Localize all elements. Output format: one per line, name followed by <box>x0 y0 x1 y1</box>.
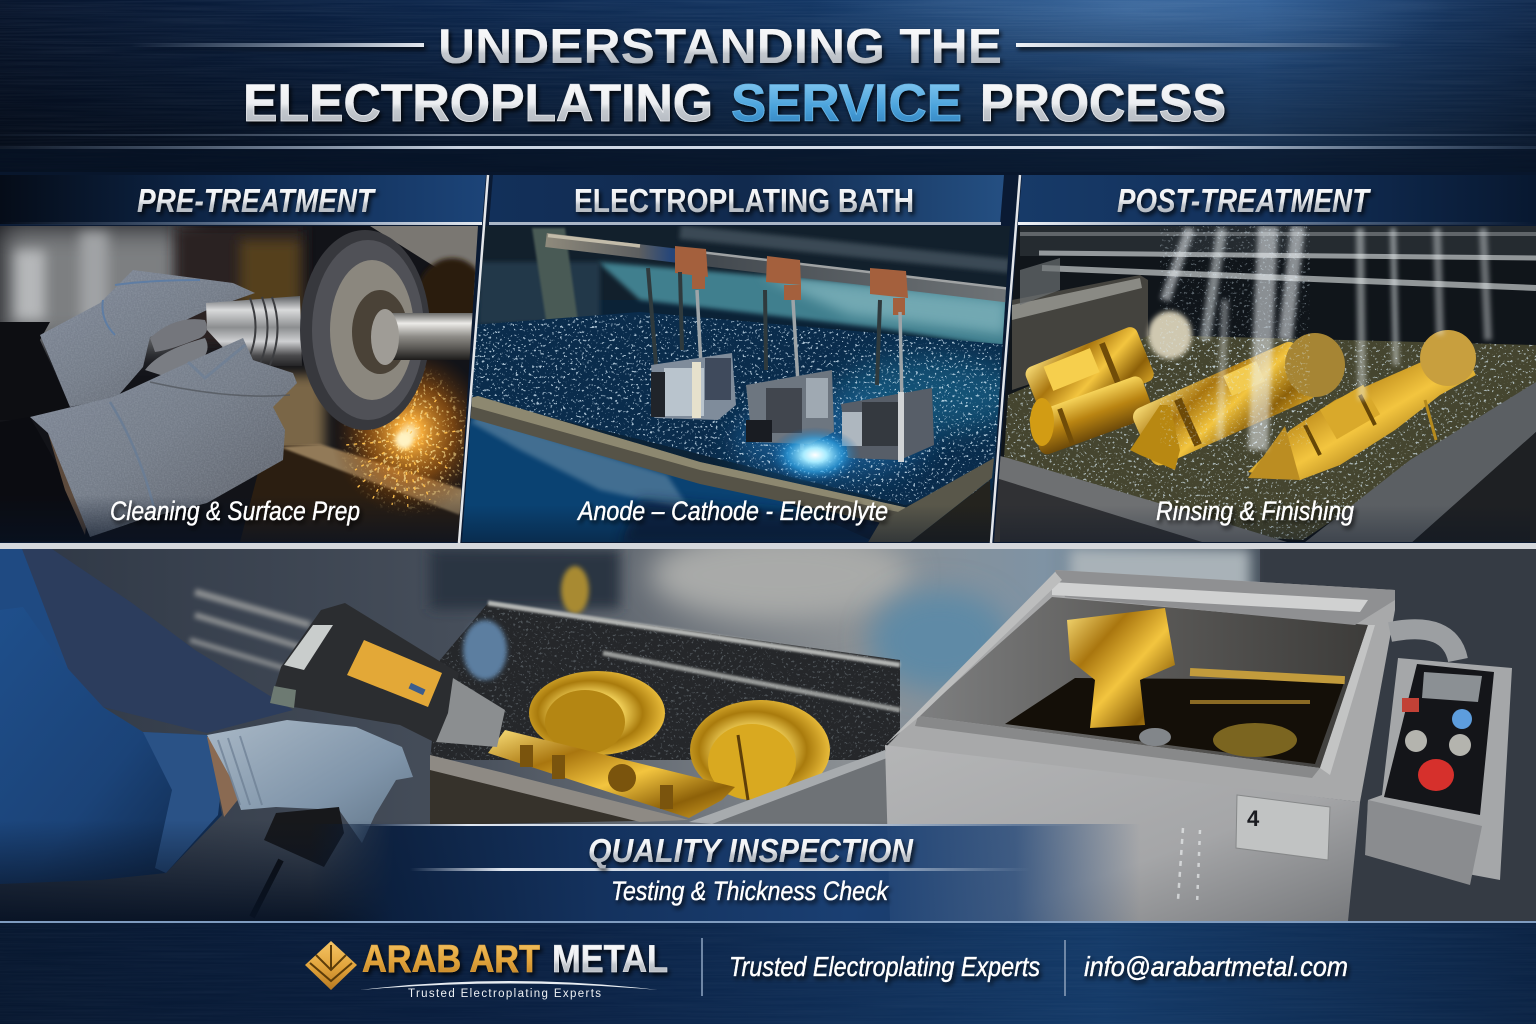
tank label: 4 <box>1247 806 1260 831</box>
yellow label <box>347 640 442 707</box>
tank rim <box>470 396 908 528</box>
tank label <box>1236 795 1330 860</box>
electrolyte glow <box>769 427 861 483</box>
photo: rinsing tank <box>990 226 1536 546</box>
heading bar: pre-treatment <box>0 175 486 225</box>
footer band <box>0 921 1536 1024</box>
rinse water surface <box>1004 335 1536 540</box>
middle tank wall <box>430 770 689 824</box>
title: UNDERSTANDING THE <box>438 20 1002 74</box>
control panel <box>1365 658 1512 885</box>
rinse tank <box>885 570 1395 921</box>
water drips <box>1178 828 1200 905</box>
hanger rods <box>697 290 903 450</box>
tagline: Trusted Electroplating Experts <box>729 951 1040 982</box>
heading bar: electroplating bath <box>489 175 1004 225</box>
workpiece <box>206 296 302 366</box>
panel: pre-treatment <box>0 175 490 542</box>
photo: plating tank <box>460 226 1025 544</box>
spark glow <box>336 360 468 508</box>
title <box>130 20 1406 133</box>
back glove <box>40 270 255 407</box>
title: PROCESS <box>980 74 1226 133</box>
front glove <box>30 338 297 537</box>
panel: post-treatment <box>990 175 1536 546</box>
logo <box>305 938 668 1000</box>
sleeve <box>0 607 222 884</box>
logo: Trusted Electroplating Experts <box>408 988 601 1000</box>
rod <box>546 240 1012 296</box>
panel: electroplating bath <box>460 175 1025 544</box>
XRF gun body <box>270 603 505 747</box>
torso <box>0 549 293 733</box>
gold parts <box>1023 311 1476 480</box>
plated part 3 <box>841 388 934 462</box>
banner: quality inspection: Testing & Thickness Check <box>611 876 889 906</box>
cuff <box>143 732 222 873</box>
plated part 1 <box>651 353 736 420</box>
falling water <box>1165 226 1488 450</box>
panel dividers <box>0 175 1536 549</box>
lower water <box>462 414 880 544</box>
bath behind <box>430 603 900 760</box>
title: ELECTROPLATING <box>243 74 713 133</box>
skin <box>207 733 240 817</box>
sleeves <box>0 322 54 372</box>
background rails <box>190 592 310 670</box>
logo: METAL <box>552 938 668 981</box>
rails <box>1020 234 1536 288</box>
photo: grinding wheel and gloves <box>0 226 490 542</box>
gold part in tank <box>1067 608 1175 728</box>
caption: post-treatment: Rinsing & Finishing <box>1156 496 1354 526</box>
caption: electroplating bath: Anode – Cathode - Electrolyte <box>576 496 888 526</box>
icon: gold diamond <box>305 941 357 990</box>
heading bar: pre-treatment: PRE-TREATMENT <box>137 182 376 219</box>
caption: pre-treatment: Cleaning & Surface Prep <box>110 496 360 526</box>
title: SERVICE <box>731 74 962 133</box>
banner: quality inspection <box>310 824 1140 921</box>
plated part 2 <box>746 370 834 444</box>
copper clamps <box>675 246 908 315</box>
XRF gun handle <box>264 807 344 867</box>
gold gear parts <box>488 671 830 818</box>
stop button <box>1418 759 1454 791</box>
header band <box>0 0 1536 175</box>
bath water <box>472 312 1012 505</box>
screen <box>1422 672 1482 702</box>
banner: quality inspection: QUALITY INSPECTION <box>588 832 914 869</box>
photo: inspection scene <box>0 530 1536 922</box>
heading bar: electroplating bath: ELECTROPLATING BATH <box>574 182 914 219</box>
ledge <box>240 445 465 542</box>
tank front walls <box>994 473 1202 542</box>
panel: quality inspection <box>0 530 1536 922</box>
wheel <box>300 230 430 430</box>
inspection glove <box>207 720 413 843</box>
logo: ARAB ART <box>362 938 540 981</box>
heading bar: post-treatment <box>1018 175 1536 225</box>
contact email: info@arabartmetal.com <box>1084 951 1348 982</box>
pipe <box>1390 629 1458 660</box>
heading bar: post-treatment: POST-TREATMENT <box>1117 182 1371 219</box>
